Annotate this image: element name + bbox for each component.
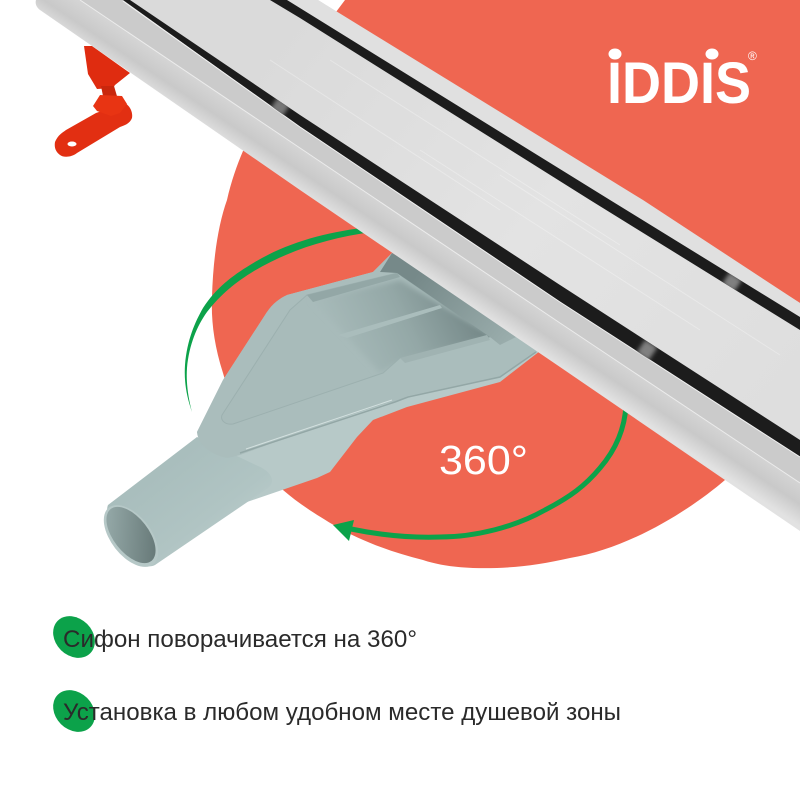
logo dot right (706, 48, 718, 60)
slot glints (274, 103, 738, 354)
green rotation arrow: lower arc with arrowhead (333, 405, 626, 541)
background coral blob (212, 0, 800, 568)
channel lid plate (130, 0, 800, 440)
siphon inner dark cavity (344, 280, 490, 368)
tube opening (93, 495, 169, 577)
siphon rim highlight (246, 400, 392, 449)
siphon recessed face (222, 273, 490, 424)
green blob marker (45, 608, 103, 666)
green blob marker (45, 682, 103, 740)
siphon body (93, 253, 540, 577)
channel inner band (80, 0, 800, 483)
siphon rib 2 (338, 305, 442, 338)
bullet 1 (45, 608, 417, 666)
label: 360 degrees: 360° (439, 437, 528, 483)
green rotation arrow: upper arc (185, 227, 372, 412)
siphon rear dark body (380, 253, 520, 345)
drain channel (36, 0, 800, 531)
bracket foot (55, 103, 132, 157)
iddis logo: IDDIS (607, 51, 751, 116)
logo registered mark: ® (748, 49, 757, 63)
bullet text: Установка в любом удобном месте душевой зоны (63, 699, 621, 726)
logo dot left (608, 48, 622, 60)
siphon rim groove (240, 352, 536, 453)
tube inner hole (97, 498, 165, 572)
red mounting bracket (55, 46, 132, 157)
channel mounting flange (36, 0, 800, 531)
siphon rib 3 (400, 335, 490, 363)
channel outer light strip (287, 0, 800, 317)
bracket foot hole (68, 142, 76, 146)
channel lower slot (123, 0, 800, 457)
siphon top rim (197, 253, 540, 458)
bracket top cone (84, 46, 130, 89)
siphon rib 1 (307, 273, 400, 302)
slot highlights (80, 0, 800, 483)
bracket nut (93, 95, 127, 116)
siphon outlet tube (107, 437, 272, 566)
siphon lower flange (197, 253, 540, 502)
channel upper slot (270, 0, 800, 330)
bullet 2 (45, 682, 621, 740)
brushed steel streaks (270, 60, 780, 355)
bullet text: Сифон поворачивается на 360° (63, 626, 417, 653)
bracket thread (101, 86, 119, 106)
